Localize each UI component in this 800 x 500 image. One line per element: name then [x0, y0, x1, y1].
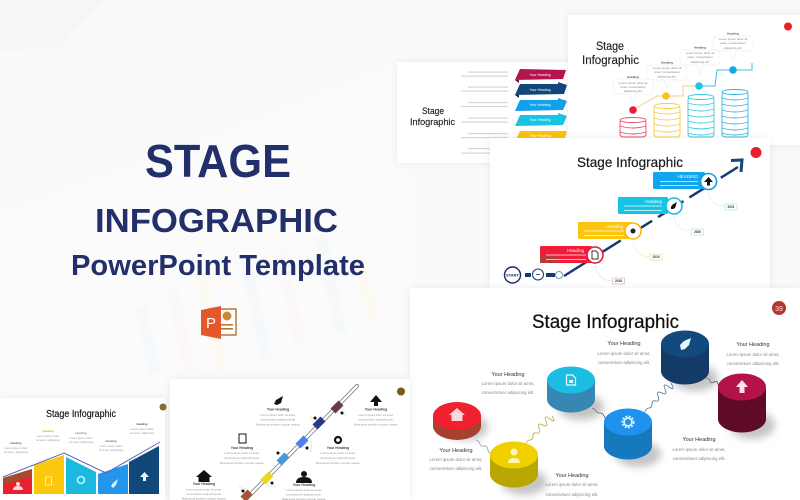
captions: Lorem ipsum dolor sit amet,: [320, 451, 356, 455]
cylinder captions: Your Heading: [607, 341, 641, 347]
chart captions: Heading: [75, 431, 87, 435]
cylinder captions: Lorem ipsum dolor sit amet,: [597, 351, 651, 356]
cylinder captions: consectetuer adipiscing elit.: [673, 456, 725, 461]
subtitle: PowerPoint Template: PowerPoint Template: [71, 250, 365, 282]
captions: Lorem ipsum dolor sit amet,: [286, 488, 322, 492]
cylinder captions: Lorem ipsum dolor sit amet,: [481, 381, 535, 386]
captions: Your Heading: [327, 446, 349, 450]
heading: Stage Infographic: [410, 106, 455, 128]
callout text: Heading: [727, 32, 739, 36]
heading: [582, 41, 639, 67]
chart segments: [3, 446, 159, 494]
growth line: [633, 86, 699, 110]
heading: Stage Infographic: Stage: [422, 106, 444, 117]
callout text: [619, 32, 748, 93]
cylinder captions: consectetuer adipiscing elit.: [727, 361, 779, 366]
captions: Your Heading: [193, 482, 215, 486]
title: INFOGRAPHIC: INFOGRAPHIC: [95, 202, 338, 239]
cylinder captions: Lorem ipsum dolor sit amet,: [726, 352, 780, 357]
cylinder captions: Lorem ipsum dolor sit amet,: [672, 447, 726, 452]
coin stack 3: [688, 94, 714, 137]
chart captions: Heading: [105, 439, 117, 443]
page badge: [397, 388, 405, 396]
captions: consectetuer adipiscing elit.: [260, 418, 296, 422]
coin stack 2: [654, 104, 680, 137]
cylinder captions: Your Heading: [736, 342, 770, 348]
cylinder captions: consectetuer adipiscing elit.: [430, 466, 482, 471]
step label: yellow: Heading: [606, 224, 623, 229]
cylinder captions: Lorem ipsum dolor sit amet,: [545, 482, 599, 487]
coin stack 4: [722, 90, 748, 137]
chart captions: sit amet, adipiscing: [36, 438, 60, 442]
captions: Maecenas porttitor congue massa.: [256, 422, 300, 426]
arrow bands: [515, 69, 567, 141]
cylinder captions: Your Heading: [439, 448, 473, 454]
page badge: 39: [775, 306, 783, 313]
year tags: 2018: [615, 279, 622, 283]
chart captions: Lorem ipsum dolor: [130, 427, 154, 431]
cylinder captions: Your Heading: [682, 437, 716, 443]
captions: Lorem ipsum dolor sit amet,: [358, 413, 394, 417]
main diagonal arrow: [564, 160, 742, 276]
icon: PowerPoint logo: P: [206, 315, 216, 332]
drop shadows: [444, 365, 775, 495]
chart captions: Lorem ipsum dolor: [36, 434, 60, 438]
callout text: adipiscing elit.: [724, 46, 743, 50]
callout text: amet, consectetuer: [720, 41, 746, 45]
year tags: 2020: [694, 230, 701, 234]
arrow bands: Your Heading: [529, 134, 551, 138]
captions: Your Heading: [231, 446, 253, 450]
chart icons: [13, 472, 149, 490]
page badge: [160, 404, 166, 410]
diagonal tube: [243, 386, 357, 499]
icon: PowerPoint logo: [201, 306, 236, 339]
callout text: adipiscing elit.: [658, 74, 677, 78]
cylinder captions: Lorem ipsum dolor sit amet,: [429, 457, 483, 462]
captions: Maecenas porttitor congue massa.: [354, 422, 398, 426]
year tags: [612, 204, 737, 284]
captions: Lorem ipsum dolor sit amet,: [260, 413, 296, 417]
start marker: [504, 267, 562, 283]
step dots: [629, 106, 637, 114]
callout text: amet, consectetuer: [654, 70, 680, 74]
cylinder captions: Your Heading: [491, 372, 525, 378]
chart captions: [4, 422, 154, 454]
captions: consectetuer adipiscing elit.: [358, 418, 394, 422]
arrow bands: Your Heading: [529, 103, 551, 107]
chart outline: [3, 442, 160, 477]
cylinder: crimson arrow: [718, 374, 766, 432]
captions: consectetuer adipiscing elit.: [186, 492, 222, 496]
callouts: [613, 36, 753, 103]
step label: blue: HEADING: [677, 174, 698, 179]
step label: red: [540, 246, 603, 263]
chart captions: Lorem ipsum dolor: [99, 444, 123, 448]
callout text: adipiscing elit.: [691, 60, 710, 64]
captions: Lorem ipsum dolor sit amet,: [186, 488, 222, 492]
heading: Stage Infographic: [46, 409, 116, 420]
panel: numbered list slide: [397, 62, 577, 163]
chart captions: sit amet, adipiscing: [99, 448, 123, 452]
callout text: Lorem ipsum dolor sit: [653, 66, 682, 70]
tube tags: [242, 412, 344, 492]
captions: Lorem ipsum dolor sit amet,: [224, 451, 260, 455]
lorem text rows: [461, 72, 508, 154]
callout text: Lorem ipsum dolor sit: [619, 81, 648, 85]
page badge: [772, 301, 786, 315]
wavy connectors: [476, 378, 721, 453]
cylinder: yellow user: [490, 442, 538, 488]
cylinder captions: Your Heading: [555, 473, 589, 479]
cylinder captions: [429, 341, 780, 497]
page badge: [750, 147, 762, 158]
callout text: Lorem ipsum dolor sit: [719, 37, 748, 41]
chart captions: Heading: [10, 441, 22, 445]
cylinder: navy rocket: [661, 330, 709, 384]
chart captions: sit amet, adipiscing: [69, 440, 93, 444]
panel: arrow timeline slide: [490, 138, 770, 288]
chart captions: Heading: [136, 422, 148, 426]
callout text: amet, consectetuer: [687, 55, 713, 59]
step label: cyan: [618, 197, 682, 214]
chart captions: Heading: [42, 429, 54, 433]
cylinder captions: consectetuer adipiscing elit.: [546, 492, 598, 497]
callout text: Heading: [694, 46, 706, 50]
year tags: 2019: [652, 255, 660, 259]
arrow bands: Your Heading: [529, 118, 551, 122]
icons: [196, 395, 382, 483]
captions: Maecenas porttitor congue massa.: [316, 461, 360, 465]
callout text: Lorem ipsum dolor sit: [686, 51, 714, 55]
heading: Stage: [596, 41, 624, 53]
tag triangles: [239, 405, 347, 496]
captions: [182, 408, 398, 500]
year tags: 2021: [727, 205, 735, 209]
captions: Maecenas porttitor congue massa.: [220, 461, 264, 465]
page badge: [784, 22, 792, 30]
step label: red: Heading: [567, 248, 584, 253]
callout text: Heading: [661, 60, 673, 64]
step label: yellow: [578, 222, 641, 239]
panel: diagonal tube slide: [170, 379, 410, 500]
captions: consectetuer adipiscing elit.: [224, 456, 260, 460]
arrow bands: Your Heading: [529, 73, 551, 77]
callout text: Heading: [627, 75, 639, 79]
chart captions: Lorem ipsum dolor: [4, 446, 28, 450]
callout text: adipiscing elit.: [624, 89, 643, 93]
arrow bands: Your Heading: [529, 88, 551, 92]
heading: Stage Infographic: [577, 154, 683, 170]
cylinder: red home: [433, 402, 481, 440]
callout text: amet, consectetuer: [620, 85, 646, 89]
heading: Stage Infographic: [532, 312, 679, 333]
chart captions: sit amet, adipiscing: [130, 431, 154, 435]
cylinder captions: consectetuer adipiscing elit.: [482, 390, 534, 395]
captions: consectetuer adipiscing elit.: [320, 456, 356, 460]
start marker: START: [506, 272, 520, 278]
panel: coin stacks slide: [568, 15, 800, 145]
heading: Infographic: [582, 55, 639, 67]
year connectors: [595, 191, 725, 281]
panel: 3D cylinders slide: [410, 288, 800, 500]
cylinder captions: consectetuer adipiscing elit.: [598, 360, 650, 365]
chart captions: Lorem ipsum dolor: [69, 436, 93, 440]
panel: area chart slide: [0, 398, 166, 500]
step label: blue: [653, 172, 716, 190]
captions: Your Heading: [365, 408, 387, 412]
captions: Your Heading: [267, 408, 289, 412]
cylinder: blue gear: [604, 408, 652, 460]
coin stack 1: [620, 118, 646, 137]
heading: Stage Infographic: Infographic: [410, 117, 455, 128]
captions: Your Heading: [293, 483, 315, 487]
step label: cyan: Heading: [645, 199, 662, 204]
title: STAGE: STAGE: [145, 135, 291, 187]
cylinder: cyan document: [547, 366, 595, 412]
captions: consectetuer adipiscing elit.: [286, 492, 322, 496]
chart captions: sit amet, adipiscing: [4, 450, 28, 454]
